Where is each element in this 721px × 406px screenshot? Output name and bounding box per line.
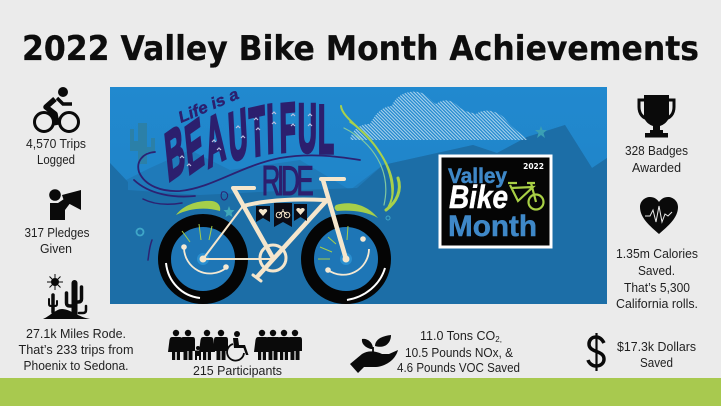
stat: emissions saved: 11.0 Tons CO	[420, 329, 495, 343]
stat: trips logged: 4,570 Trips	[26, 137, 86, 151]
chevrons on letters	[180, 112, 312, 166]
RIDE: RIDE	[262, 158, 314, 205]
stat: dollars saved: $17.3k Dollars	[617, 340, 696, 354]
hub left	[200, 256, 206, 262]
stat: miles rode: Phoenix to Sedona.	[24, 359, 128, 373]
stat: trips logged: Logged	[37, 153, 75, 167]
stat: dollars saved	[617, 340, 696, 370]
stat: miles rode: That’s 233 trips from	[18, 343, 134, 357]
stat: participants: 215 Participants	[193, 364, 282, 378]
swirl lines	[134, 152, 360, 260]
BEAUTIFUL: BEAUTIFUL	[162, 90, 334, 197]
hub right	[342, 256, 350, 262]
icon: group of people with wheelchair user	[168, 330, 302, 361]
cactus	[130, 123, 155, 164]
stat: emissions saved: 10.5 Pounds NOx, &	[405, 346, 514, 360]
stat: calories saved: 1.35m Calories	[616, 247, 698, 261]
stat: miles rode: 27.1k Miles Rode.	[26, 327, 126, 341]
logo: Valley Bike Month 2022: Month	[448, 210, 537, 243]
near mountains	[110, 125, 607, 304]
icon: cyclist	[34, 87, 78, 132]
stat: trips logged	[26, 137, 86, 167]
icon: trophy	[639, 95, 674, 138]
stat: emissions saved: 2,	[495, 335, 502, 344]
small dots	[136, 206, 390, 236]
logo: Valley Bike Month 2022: Bike	[449, 179, 508, 215]
stat: badges awarded	[625, 144, 688, 175]
stat: pledges given: Given	[40, 242, 72, 256]
striped cloud	[350, 92, 527, 140]
stat: badges awarded: Awarded	[632, 161, 681, 175]
stat: emissions saved	[397, 329, 520, 375]
stat: badges awarded: 328 Badges	[625, 144, 688, 158]
far mountains	[110, 125, 607, 304]
icon: hand holding plant	[350, 335, 398, 373]
stat: pledges given	[24, 226, 90, 256]
star	[535, 126, 547, 138]
footer band	[0, 378, 721, 406]
flag banners	[256, 203, 307, 227]
bike frame	[203, 179, 346, 281]
left wheel	[164, 220, 242, 298]
stat: calories saved	[616, 247, 698, 311]
icon: heart with pulse	[640, 197, 678, 234]
stat: calories saved: That’s 5,300	[624, 281, 690, 295]
logo: Valley Bike Month 2022: Valley	[448, 165, 507, 188]
slogan text	[162, 86, 334, 205]
right wheel	[308, 220, 385, 300]
logo bike	[508, 183, 544, 210]
icon: megaphone person	[49, 189, 81, 220]
stat: miles rode	[18, 327, 134, 373]
stat: pledges given: 317 Pledges	[24, 226, 90, 240]
logo: Valley Bike Month 2022	[440, 156, 551, 247]
Life is a: Life is a	[176, 86, 242, 127]
icon: dollar sign	[588, 333, 604, 371]
banner sky	[110, 87, 607, 304]
stat: emissions saved: 4.6 Pounds VOC Saved	[397, 361, 520, 375]
stat: dollars saved: Saved	[640, 356, 673, 370]
stat: calories saved: California rolls.	[616, 297, 698, 311]
banner illustration	[110, 86, 607, 304]
logo: Valley Bike Month 2022: 2022	[523, 162, 544, 171]
green fenders	[176, 201, 378, 218]
stat: calories saved: Saved.	[638, 264, 675, 278]
icon: desert cactus and sun	[43, 274, 90, 319]
green swooshes	[341, 106, 399, 210]
